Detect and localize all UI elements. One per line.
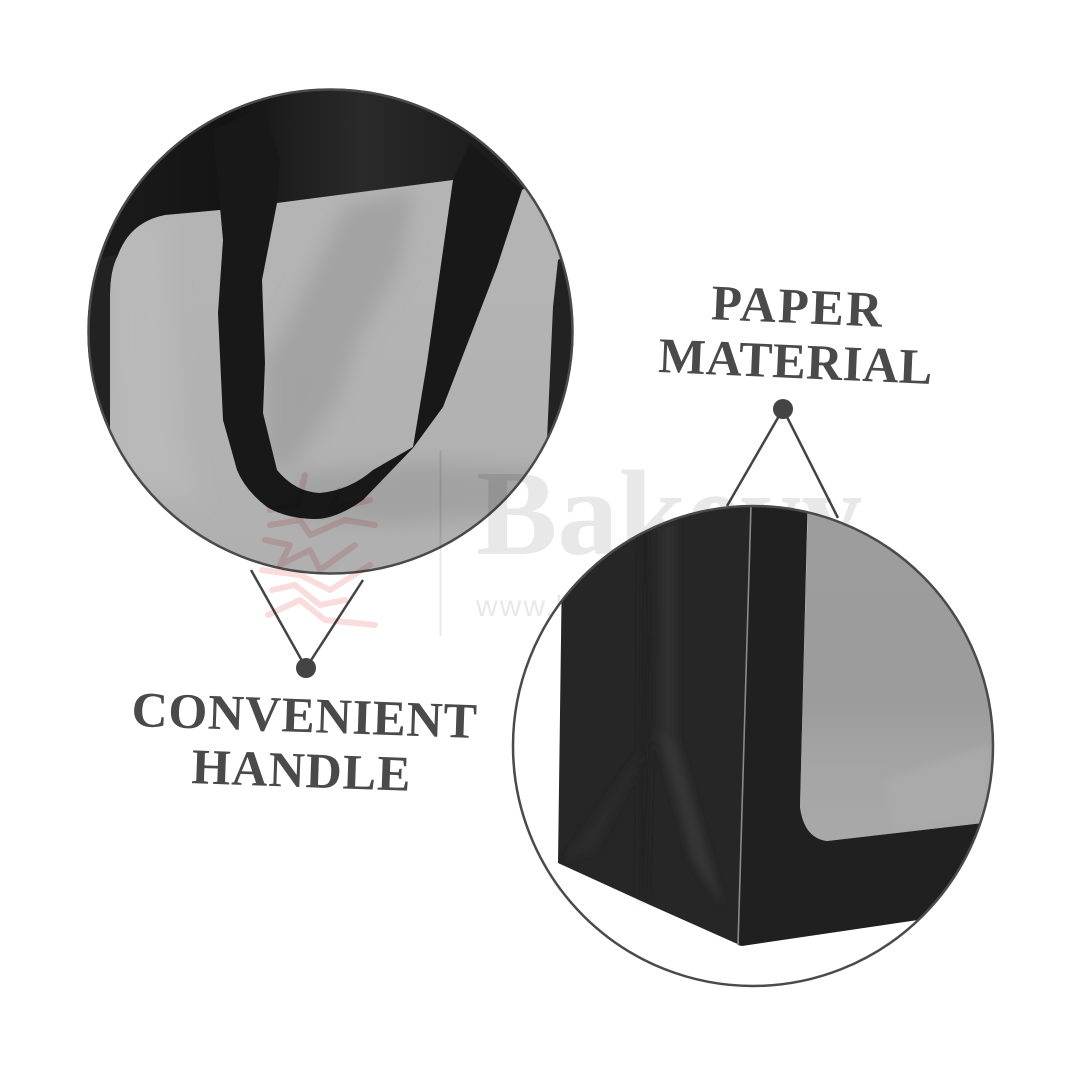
side crease highlights bbox=[636, 527, 716, 904]
right dark side bbox=[547, 258, 574, 436]
bag front face bbox=[738, 507, 979, 946]
watermark brand name: Bakeyy bbox=[476, 446, 862, 581]
connector: paper material bbox=[727, 399, 838, 518]
label: convenient handle: CONVENIENT bbox=[131, 681, 478, 749]
label: paper material bbox=[657, 274, 934, 395]
watermark divider bbox=[440, 450, 442, 636]
inside of bag panel bbox=[800, 500, 1000, 841]
watermark url: www.bakeyy.com bbox=[475, 590, 734, 623]
bag side face bbox=[558, 490, 751, 946]
watermark logo bbox=[262, 475, 375, 625]
strap bbox=[218, 180, 522, 519]
connector: convenient handle bbox=[251, 570, 363, 678]
panel: handle close-up circle bbox=[80, 80, 590, 590]
inner shading bbox=[265, 193, 528, 524]
label: convenient handle: HANDLE bbox=[191, 738, 412, 802]
bag top black band bbox=[88, 88, 524, 428]
fold line bbox=[738, 505, 751, 945]
infographic canvas bbox=[87, 88, 994, 988]
left dark edge bbox=[88, 255, 118, 428]
panel: paper material close-up circle bbox=[513, 490, 1000, 986]
label: paper material: PAPER bbox=[710, 274, 885, 338]
label: paper material: MATERIAL bbox=[657, 327, 934, 395]
inner creases bbox=[885, 745, 990, 828]
bag inner paper panel bbox=[80, 80, 590, 590]
label: convenient handle bbox=[131, 681, 478, 802]
